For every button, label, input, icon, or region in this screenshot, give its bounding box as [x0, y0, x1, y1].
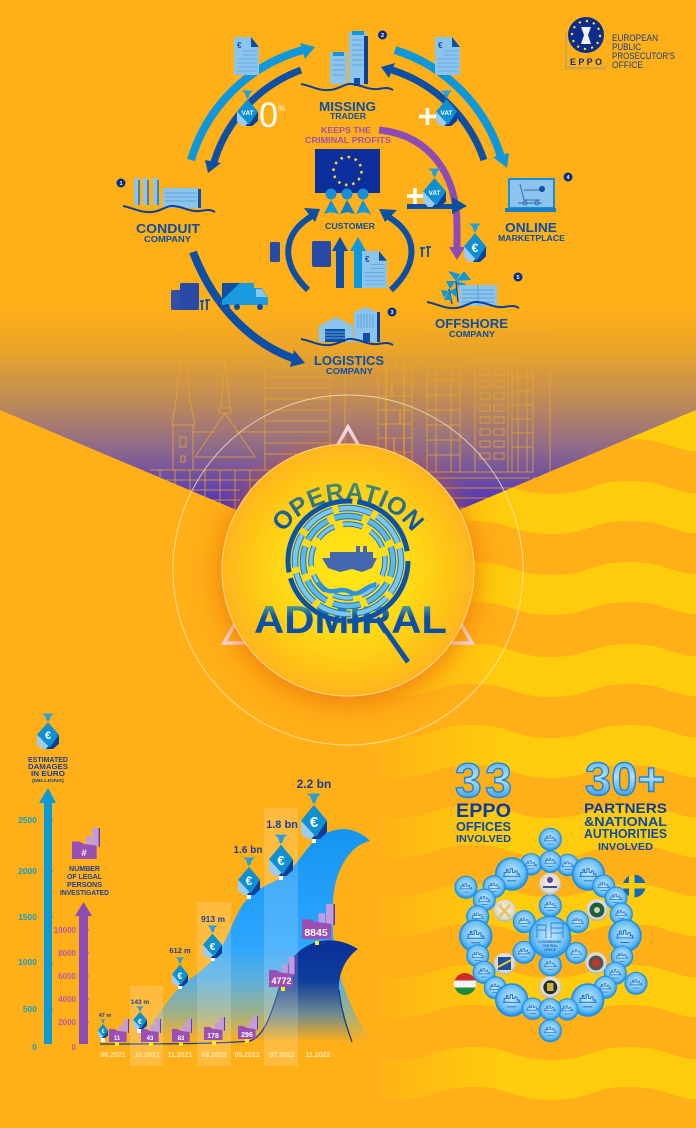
icon: invoice left	[234, 37, 259, 75]
data point: 612 m: €	[177, 971, 183, 981]
logo frame	[566, 33, 606, 68]
label: keeps the criminal profits: CRIMINAL PROFITS	[305, 136, 392, 145]
icon: VAT bag right with plus	[419, 91, 457, 126]
data point: 1.6 bn: 1.6 bn	[234, 845, 262, 856]
icon: online marketplace laptop	[505, 179, 556, 212]
data point: 178 persons: 178	[207, 1033, 219, 1040]
number badge 4: 4	[566, 175, 570, 181]
label: missing trader: TRADER	[330, 112, 366, 121]
axis labels: legal persons: 2000	[58, 1018, 77, 1027]
logo stars	[572, 21, 600, 49]
axis labels: damages: 0	[32, 1042, 37, 1052]
axis labels: legal persons: 4000	[58, 995, 77, 1004]
arrow: purple to offshore	[379, 130, 465, 260]
heading: number of legal persons: NUMBER	[69, 866, 100, 873]
heading: estimated damages: IN EURO	[31, 771, 66, 778]
label EPPO: EPPO	[456, 801, 511, 822]
icon: euro bag offshore	[464, 224, 486, 262]
arrow: light up	[350, 237, 366, 288]
flag: Sweden	[623, 874, 647, 898]
label: conduit company: COMPANY	[144, 235, 192, 244]
yellow wave bands	[400, 411, 696, 1100]
logo: Operation Admiral	[254, 482, 447, 664]
icon: VAT bag left with 0%: %	[278, 104, 285, 113]
logo hourglass	[581, 27, 591, 44]
partner badges	[494, 873, 608, 998]
label: keeps the criminal profits	[305, 126, 392, 145]
icon: invoice right: €	[438, 41, 443, 50]
label: offshore company	[435, 316, 508, 339]
icon: phone left	[270, 242, 280, 262]
office network wheel	[454, 828, 647, 1042]
flag: Hungary	[454, 973, 476, 995]
icon: tablet centre	[312, 241, 331, 267]
label: online marketplace: MARKETPLACE	[498, 234, 566, 243]
axis labels: legal persons: 0	[72, 1043, 77, 1052]
icon: logistics warehouse	[301, 307, 393, 345]
arrow: light blue missing trader to online marketplace	[395, 50, 509, 168]
data point: 913 m: 913 m	[201, 914, 225, 924]
number badge 1	[116, 178, 126, 188]
heading: estimated damages: (MILLIONS)	[32, 778, 65, 783]
x-axis date labels: 07.2022	[269, 1052, 295, 1059]
heading: estimated damages: ESTIMATED	[28, 757, 68, 764]
label: missing trader: MISSING	[319, 99, 376, 114]
number 33: 33	[455, 755, 512, 808]
label: offshore company: COMPANY	[449, 330, 496, 339]
label: conduit company: CONDUIT	[136, 221, 200, 236]
label: keeps the criminal profits: KEEPS THE	[321, 126, 372, 135]
label: offshore company: OFFSHORE	[435, 316, 508, 331]
axis labels: damages: 500	[23, 1004, 37, 1014]
data point: 296 persons	[238, 1016, 258, 1039]
data point: 83 persons: 83	[178, 1036, 185, 1042]
x-axis date labels: 03.2022	[201, 1052, 227, 1059]
stat: 33 EPPO offices involved	[455, 755, 512, 845]
logo name: PROSECUTOR'S	[612, 51, 675, 61]
label offices: OFFICES	[456, 819, 511, 834]
icon: VAT bag left with 0%: 0	[259, 96, 278, 135]
number badge 2: 2	[381, 33, 384, 39]
icon: euro bag offshore: €	[472, 241, 479, 255]
logo name	[612, 33, 675, 70]
label national: &NATIONAL	[584, 814, 667, 829]
data point: 143 m: €	[138, 1019, 142, 1026]
label authorities: AUTHORITIES	[584, 826, 667, 841]
skyline illustration	[150, 333, 550, 510]
data point: 83 persons	[172, 1019, 192, 1042]
data point: 47 m: 47 m	[99, 1013, 111, 1019]
heading: number of legal persons: OF LEGAL	[67, 874, 103, 881]
data point: 913 m: €	[210, 942, 216, 953]
heading: number of legal persons: INVESTIGATED	[60, 890, 109, 897]
data point: 1.6 bn: €	[246, 874, 253, 888]
icon: missing trader towers	[301, 31, 393, 90]
axis labels: damages: 1000	[18, 957, 37, 967]
lower orange background	[0, 410, 696, 1128]
heading: number of legal persons: PERSONS	[67, 882, 102, 889]
logo name: PUBLIC	[612, 42, 641, 52]
label: missing trader	[319, 99, 376, 121]
x-axis date labels: 11.2022	[306, 1052, 331, 1059]
axis labels: damages: 1500	[18, 912, 37, 922]
axis labels: legal persons: 8000	[58, 949, 77, 958]
label involved: INVOLVED	[456, 833, 511, 845]
data point: 8845 persons	[302, 904, 335, 939]
label involved: INVOLVED	[598, 842, 653, 853]
swirling arrows	[295, 508, 401, 614]
data point: 1.8 bn	[266, 819, 298, 876]
arrow: customer right	[379, 209, 412, 290]
label: conduit company	[136, 221, 200, 244]
axis labels: damages: 2500	[18, 815, 37, 825]
dark curve line	[100, 975, 352, 1044]
axis labels: legal persons: 10000	[54, 926, 77, 935]
data point: 11 persons	[109, 1019, 129, 1042]
icon: small arrows right	[420, 247, 431, 257]
ship	[322, 546, 377, 572]
logo name: EUROPEAN	[612, 33, 658, 43]
data point: 1.8 bn: 1.8 bn	[266, 819, 298, 831]
triangle behind central disc	[224, 427, 472, 643]
logo name: OFFICE	[612, 60, 643, 70]
number badge 3	[388, 308, 396, 316]
central office bubble: LUXEMBOURG	[538, 940, 562, 944]
highlight columns	[130, 808, 298, 1066]
label: logistics company	[314, 353, 384, 376]
arrow: dark blue missing trader to conduit	[205, 70, 301, 173]
data point: 143 m	[131, 999, 149, 1029]
data point: 2.2 bn	[297, 777, 331, 839]
data point: 296 persons: 296	[241, 1032, 253, 1039]
light blue wave: estimated damages	[103, 829, 370, 1044]
icon: invoice centre	[362, 251, 387, 288]
data point: 8845 persons: 8845	[304, 927, 328, 939]
heading: number of legal persons	[60, 866, 109, 897]
data point: 11 persons: 11	[114, 1036, 121, 1042]
x-axis date labels: 05.2022	[234, 1052, 260, 1059]
data point: 43 persons: 43	[147, 1036, 154, 1042]
x-axis date labels: 10.2021	[134, 1052, 160, 1059]
icon: estimated damages bag	[37, 714, 59, 749]
data point: 47 m: €	[102, 1029, 105, 1035]
data point: 2.2 bn: 2.2 bn	[297, 777, 331, 791]
icon: customers	[324, 188, 371, 214]
data point: 178 persons	[204, 1017, 225, 1040]
icon: invoice right	[435, 37, 460, 75]
central office bubble: CENTRAL	[542, 944, 558, 948]
icon: VAT bag left with 0%: VAT	[241, 110, 254, 117]
background: orange to purple gradient	[0, 0, 696, 560]
number 30+: 30+	[585, 753, 665, 805]
number badge 1: 1	[119, 181, 123, 187]
label: online marketplace: ONLINE	[505, 220, 557, 235]
data point: 4772 persons	[269, 957, 296, 987]
data point: 1.8 bn: €	[277, 853, 285, 868]
icon: VAT bag centre with plus	[407, 169, 446, 207]
icon: EU flag	[315, 149, 380, 193]
logo disc	[568, 17, 604, 53]
x-axis date labels: 11.2021	[168, 1052, 193, 1059]
axis: damages arrow	[39, 788, 56, 1044]
central office bubble: OFFICE	[544, 948, 556, 952]
EPPO logo	[566, 17, 675, 70]
axis labels: damages: 2000	[18, 866, 37, 876]
number badge 2	[378, 30, 387, 40]
dark blue wave: legal persons	[250, 940, 358, 1042]
central office bubble	[529, 916, 571, 958]
label: logistics company: LOGISTICS	[314, 353, 384, 368]
thin ring around central disc	[173, 395, 523, 745]
x-axis date labels	[100, 1052, 331, 1059]
axis labels: legal persons: 6000	[58, 972, 77, 981]
data point: 612 m: 612 m	[169, 946, 191, 955]
icon: invoice centre: €	[365, 255, 370, 264]
number badge 5: 5	[516, 275, 520, 281]
number badge 4	[564, 172, 572, 182]
data point: 2.2 bn: €	[310, 814, 319, 831]
label: online marketplace	[498, 220, 566, 243]
icon: legal persons factory	[72, 828, 100, 859]
icon: delivery truck	[222, 283, 268, 310]
arrow: dark blue online marketplace to missing trader	[381, 63, 484, 160]
axis labels: damages	[18, 815, 37, 1052]
VAT carousel diagram	[116, 30, 572, 376]
icon: conduit factory	[123, 178, 215, 212]
x-axis date labels: 06.2021	[100, 1052, 126, 1059]
axis labels: legal persons	[54, 926, 77, 1052]
icon: tablets by conduit arrow	[171, 283, 210, 310]
markers: damages points	[101, 839, 316, 1042]
icon: VAT bag centre with plus: VAT	[428, 190, 441, 197]
data point: 913 m	[201, 914, 225, 958]
icon: estimated damages bag: €	[45, 730, 51, 742]
central disc	[222, 444, 474, 696]
axis: legal persons arrow	[75, 902, 92, 1044]
data point: 612 m	[169, 946, 191, 986]
arrow: customer left	[288, 208, 320, 290]
chart: damages and legal persons over time	[18, 714, 370, 1066]
logo word: OPERATION: OPERATION	[274, 482, 424, 531]
label partners: PARTNERS	[584, 800, 667, 816]
number badge 5	[514, 272, 522, 282]
icon: VAT bag right with plus: VAT	[440, 110, 453, 117]
stat: 30+ partners and national authorities	[584, 753, 667, 853]
heading: estimated damages: DAMAGES	[28, 764, 68, 771]
label: customer: CUSTOMER	[325, 222, 375, 231]
data point: 1.6 bn	[234, 845, 262, 895]
markers: legal persons points	[115, 941, 319, 1046]
icon: invoice left: €	[237, 41, 242, 50]
icon: offshore island and building	[427, 271, 519, 308]
icon: VAT bag left with 0%	[237, 91, 285, 135]
icon: legal persons factory: #	[81, 848, 87, 858]
arrow: dark horizontal VAT	[407, 197, 467, 214]
heading: estimated damages	[28, 757, 68, 783]
label: logistics company: COMPANY	[326, 367, 374, 376]
data point: 143 m: 143 m	[131, 999, 149, 1006]
data point: 43 persons	[141, 1019, 161, 1042]
magnifier outer ring	[288, 501, 408, 662]
logo word: ADMIRAL: ADMIRAL	[254, 599, 447, 642]
number badge 3: 3	[390, 310, 394, 316]
data point: 47 m	[98, 1013, 111, 1038]
arrow: dark up	[332, 237, 348, 288]
arrow: conduit to logistics	[193, 252, 305, 367]
arrow: light blue conduit to missing trader	[191, 43, 315, 160]
logo acronym: EPPO	[570, 57, 602, 67]
data point: 4772 persons: 4772	[271, 976, 292, 986]
